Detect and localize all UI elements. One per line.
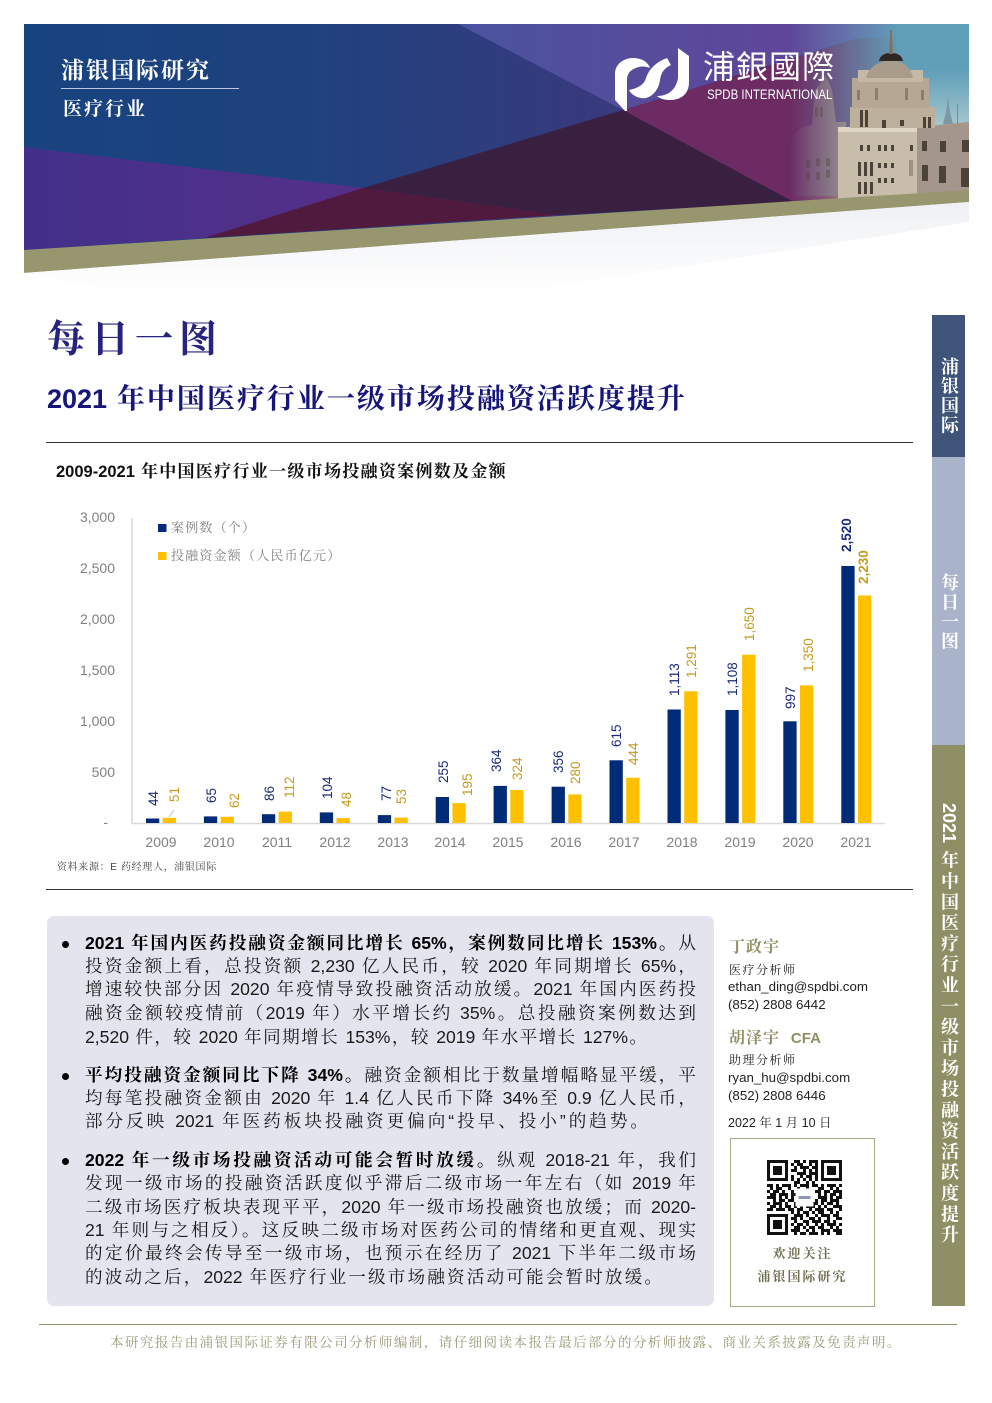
header: sector: 医疗行业	[63, 99, 147, 120]
series: case count bars	[146, 566, 855, 823]
y axis labels: 500	[92, 764, 115, 780]
x axis labels: 2014	[434, 834, 466, 850]
logo english: SPDB INTERNATIONAL	[707, 87, 832, 102]
bullet 3: 的定价最终会传导至一级市场，也预示在经历了 2021 下半年二级市场	[85, 1243, 696, 1263]
financing amount data labels: 444	[626, 742, 641, 765]
subtitle: 2021 年中国医疗行业一级市场投融资活跃度提升	[47, 383, 687, 414]
case count data labels: 255	[436, 760, 451, 783]
case count data labels: 1,113	[667, 663, 682, 696]
sidebar: title segment: 2021 年中国医疗行业一级市场投融资活跃度提升	[939, 803, 959, 1246]
chart title: 2009-2021 年中国医疗行业一级市场投融资案例数及金额	[56, 462, 507, 481]
analyst 2	[728, 1029, 850, 1103]
x axis labels: 2010	[203, 834, 235, 850]
financing amount data labels: 112	[282, 776, 297, 798]
financing amount data labels: 53	[394, 789, 409, 804]
legend	[158, 520, 341, 563]
financing amount data labels: 280	[568, 761, 583, 784]
sidebar: brand segment: 浦银国际	[939, 357, 959, 435]
case count data labels: 44	[146, 790, 161, 806]
QR panel	[730, 1138, 875, 1307]
analyst 2: 助理分析师	[729, 1053, 797, 1067]
bar chart	[80, 509, 885, 850]
x axis labels: 2016	[550, 834, 582, 850]
bullet 1: 增速较快部分因 2020 年疫情导致投融资活动放缓。2021 年国内医药投	[85, 979, 696, 999]
legend: 投融资金额（人民币亿元）	[171, 548, 341, 563]
y axis labels	[80, 509, 115, 830]
bullet 2: 平均投融资金额同比下降 34%。融资金额相比于数量增幅略显平缓，平	[85, 1065, 696, 1085]
financing amount data labels	[167, 550, 871, 808]
x axis labels: 2020	[782, 834, 814, 850]
financing amount data labels: 324	[510, 757, 525, 780]
financing amount data labels: 62	[227, 793, 242, 808]
analyst 2: 胡泽宇 CFA	[729, 1030, 821, 1047]
case count data labels: 615	[609, 724, 624, 747]
x axis labels: 2021	[840, 834, 872, 850]
panel: key points	[47, 916, 714, 1306]
y axis labels: 2,500	[80, 560, 115, 576]
logo mark	[615, 48, 689, 111]
report date: 2022 年 1 月 10 日	[728, 1116, 832, 1130]
legend: 案例数（个）	[171, 520, 256, 535]
case count data labels: 356	[551, 750, 566, 773]
bullet 3: 的波动之后，2022 年医疗行业一级市场融资活动可能会暂时放缓。	[85, 1267, 662, 1287]
analyst 2: ryan_hu@spdbi.com	[728, 1070, 850, 1085]
case count data labels: 2,520	[839, 518, 854, 552]
bullet 1: 投资金额上看，总投资额 2,230 亿人民币，较 2020 年同期增长 65%，	[85, 956, 696, 976]
y axis labels: 1,000	[80, 713, 115, 729]
x axis labels: 2009	[145, 834, 177, 850]
y axis labels: -	[103, 814, 108, 830]
x axis labels: 2017	[608, 834, 640, 850]
building photo	[790, 24, 969, 203]
footer disclaimer: 本研究报告由浦银国际证券有限公司分析师编制，请仔细阅读本报告最后部分的分析师披露、商业关系披露及免责声明。	[110, 1335, 902, 1350]
y axis labels: 2,000	[80, 611, 115, 627]
header: research brand: 浦银国际研究	[61, 57, 211, 83]
analyst 1: 丁政宇	[729, 939, 780, 956]
analyst 1: 医疗分析师	[729, 963, 797, 977]
bullet 3: 2022 年一级市场投融资活动可能会暂时放缓。纵观 2018-21 年，我们	[85, 1150, 696, 1170]
analyst 1: (852) 2808 6442	[728, 997, 826, 1012]
bullet 1: 2021 年国内医药投融资金额同比增长 65%，案例数同比增长 153%。从	[85, 933, 696, 953]
x axis labels: 2015	[492, 834, 524, 850]
case count data labels: 104	[320, 776, 335, 799]
bullet 2: 部分反映 2021 年医药板块投融资更偏向“投早、投小”的趋势。	[85, 1111, 648, 1131]
bullet 1: 2,520 件，较 2020 年同期增长 153%，较 2019 年水平增长 127%。	[85, 1027, 647, 1047]
sidebar: series segment	[932, 457, 965, 745]
QR caption: 浦银国际研究	[757, 1269, 848, 1284]
case count data labels: 997	[783, 686, 798, 709]
QR caption: 欢迎关注	[772, 1246, 832, 1261]
case count data labels	[146, 518, 854, 806]
bullet 1	[62, 933, 696, 1047]
page title: 每日一图	[47, 319, 223, 361]
financing amount data labels: 2,230	[856, 550, 871, 584]
x axis labels: 2013	[377, 834, 409, 850]
logo wordmark: 浦銀國際	[703, 49, 835, 85]
bullet 3: 发现一级市场的投融资活跃度似乎滞后二级市场一年左右（如 2019 年	[85, 1173, 696, 1193]
y axis labels: 1,500	[80, 662, 115, 678]
financing amount data labels: 51	[167, 787, 182, 802]
x axis labels: 2012	[319, 834, 351, 850]
bullet 3	[62, 1150, 696, 1287]
financing amount data labels: 195	[460, 773, 475, 796]
sidebar: title segment	[932, 745, 965, 1306]
bullet 2: 均每笔投融资金额由 2020 年 1.4 亿人民币下降 34%至 0.9 亿人民币，	[85, 1088, 696, 1108]
financing amount data labels: 1,291	[684, 644, 699, 678]
chart source: 资料来源：E 药经理人，浦银国际	[57, 862, 217, 873]
x axis labels	[145, 834, 872, 850]
bullet 3: 21 年则与之相反）。这反映二级市场对医药公司的情绪和更直观、现实	[85, 1220, 696, 1240]
bullet 3: 二级市场医疗板块表现平平，2020 年一级市场投融资也放缓；而 2020-	[85, 1197, 696, 1217]
case count data labels: 1,108	[725, 662, 740, 696]
header banner	[24, 24, 969, 273]
y axis labels: 3,000	[80, 509, 115, 525]
x axis labels: 2019	[724, 834, 756, 850]
series: financing amount bars	[163, 596, 871, 823]
financing amount data labels: 48	[339, 792, 354, 807]
bullet 1: 融资金额较疫情前（2019 年）水平增长约 35%。总投融资案例数达到	[85, 1003, 696, 1023]
sidebar: brand segment	[932, 315, 965, 457]
x axis labels: 2011	[262, 834, 292, 850]
analyst 1: ethan_ding@spdbi.com	[728, 979, 868, 994]
analyst 2: (852) 2808 6446	[728, 1088, 826, 1103]
case count data labels: 77	[379, 786, 394, 801]
case count data labels: 65	[204, 788, 219, 803]
case count data labels: 364	[489, 749, 504, 772]
sidebar: series segment: 每日一图	[939, 573, 959, 651]
icon: QR code	[767, 1160, 842, 1235]
bullet 2	[62, 1065, 696, 1131]
financing amount data labels: 1,650	[742, 607, 757, 641]
financing amount data labels: 1,350	[801, 638, 816, 672]
x axis labels: 2018	[666, 834, 698, 850]
case count data labels: 86	[262, 786, 277, 801]
analyst 1	[728, 938, 868, 1012]
